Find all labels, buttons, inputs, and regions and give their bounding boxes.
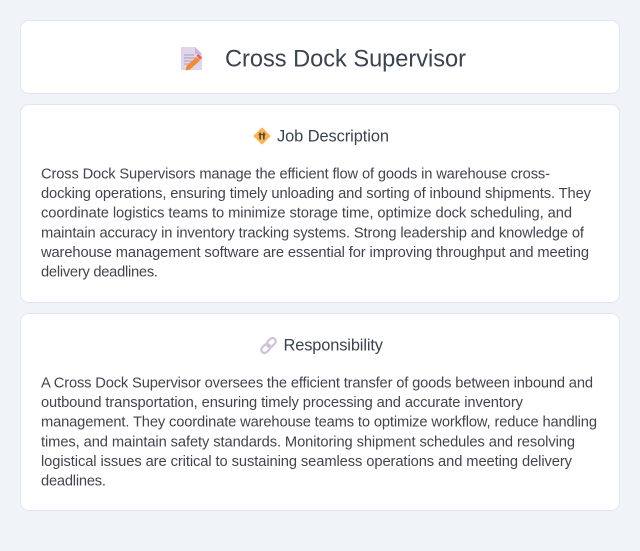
text block: responsibility: deadlines. (41, 474, 106, 490)
text block: responsibility: times, and maintain safety standards. Monitoring shipment schedules and resolving (41, 434, 575, 450)
heading: responsibility: Responsibility (284, 336, 384, 354)
text block: job description: maintain accuracy in inventory tracking systems. Strong leadership and knowledge of (41, 225, 585, 241)
text block: job description (40, 166, 592, 280)
panel: responsibility (20, 314, 620, 510)
icon: document with pencil (181, 47, 202, 70)
text block: job description: coordinate logistics teams to minimize storage time, optimize dock scheduling, and (41, 206, 572, 222)
text block: responsibility: outbound transportation, ensuring timely processing and accurate inventory (41, 395, 524, 411)
text block: job description: delivery deadlines. (41, 264, 158, 280)
panel: job description (20, 104, 620, 302)
icon: road sign diamond (254, 128, 270, 144)
text block: job description: docking operations, ensuring timely unloading and sorting of inbound shipments. They (41, 186, 592, 202)
heading: job description: Job Description (277, 128, 389, 146)
text block: job description: Cross Dock Supervisors manage the efficient flow of goods in warehouse cross- (41, 166, 550, 182)
title: Cross Dock Supervisor (225, 46, 466, 72)
text block: job description: warehouse management software are essential for improving throughput and meeting (40, 245, 589, 261)
text block: responsibility: A Cross Dock Supervisor oversees the efficient transfer of goods between inbound and (41, 376, 593, 392)
panel: title card (20, 20, 620, 94)
text block: responsibility (41, 376, 597, 490)
icon: chain link (260, 337, 277, 354)
text block: responsibility: logistical issues are critical to sustaining seamless operations and meeting delivery (41, 454, 573, 470)
text block: responsibility: management. They coordinate warehouse teams to optimize workflow, reduce handling (41, 415, 597, 431)
